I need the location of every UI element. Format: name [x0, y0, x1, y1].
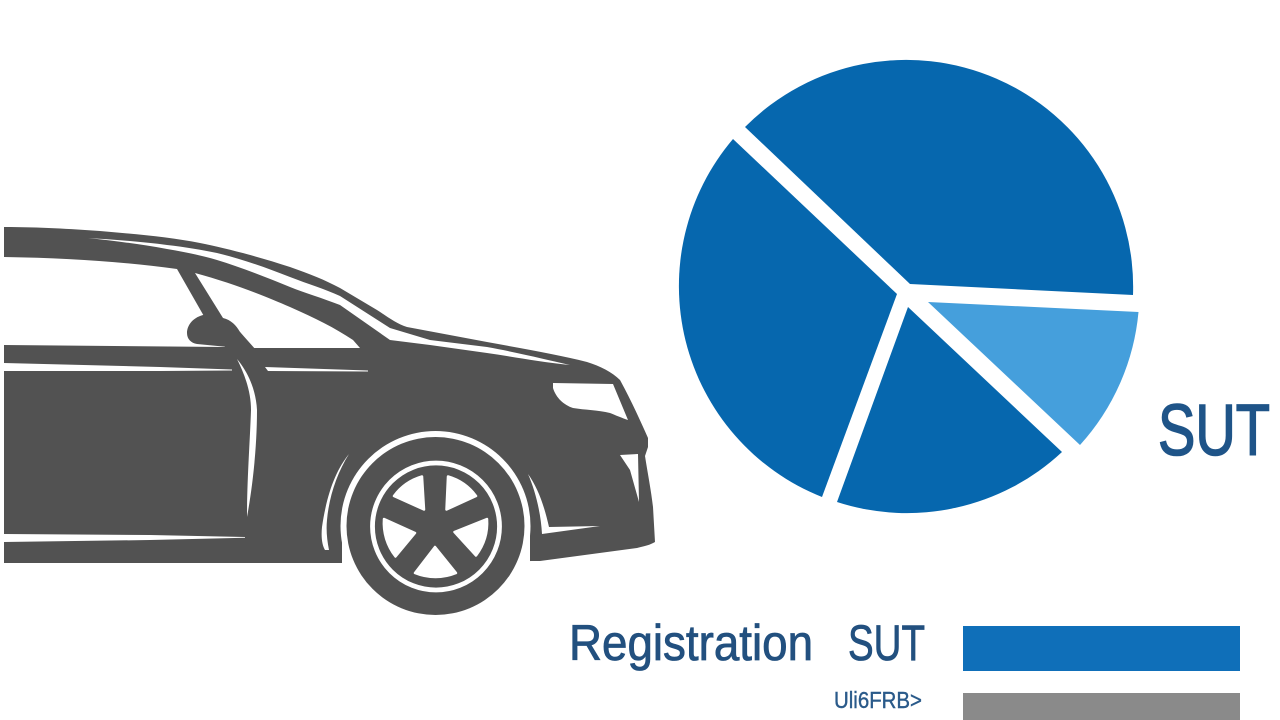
side mirror: [187, 314, 256, 350]
front arch line: [528, 474, 600, 534]
icon: car silhouette: [4, 227, 655, 621]
front side window: [195, 273, 360, 348]
wheel: [340, 431, 530, 621]
legend bar: blue: [963, 626, 1240, 671]
roof highlight stripe: [88, 238, 570, 365]
rear side window: [4, 257, 225, 347]
belt line front: [265, 367, 368, 372]
pie slice: bottom: [837, 307, 1062, 513]
belt line: [4, 363, 232, 371]
pie slice: top: [745, 60, 1133, 295]
door line: [237, 359, 257, 517]
legend label: Registration: Registration: [569, 615, 813, 671]
front vent: [620, 454, 639, 502]
pie slice: left: [679, 139, 897, 497]
pie chart: [679, 60, 1138, 513]
car body: [4, 227, 655, 563]
sill line: [4, 534, 245, 542]
legend label: SUT: SUT: [848, 615, 925, 671]
legend label: small: Uli6FRB>: [834, 687, 922, 713]
wheel windows: [384, 476, 487, 577]
pie slice: light accent: [928, 302, 1138, 445]
rear arch line: [322, 454, 349, 550]
headlight: [553, 383, 628, 420]
legend bar: gray: [963, 693, 1240, 720]
